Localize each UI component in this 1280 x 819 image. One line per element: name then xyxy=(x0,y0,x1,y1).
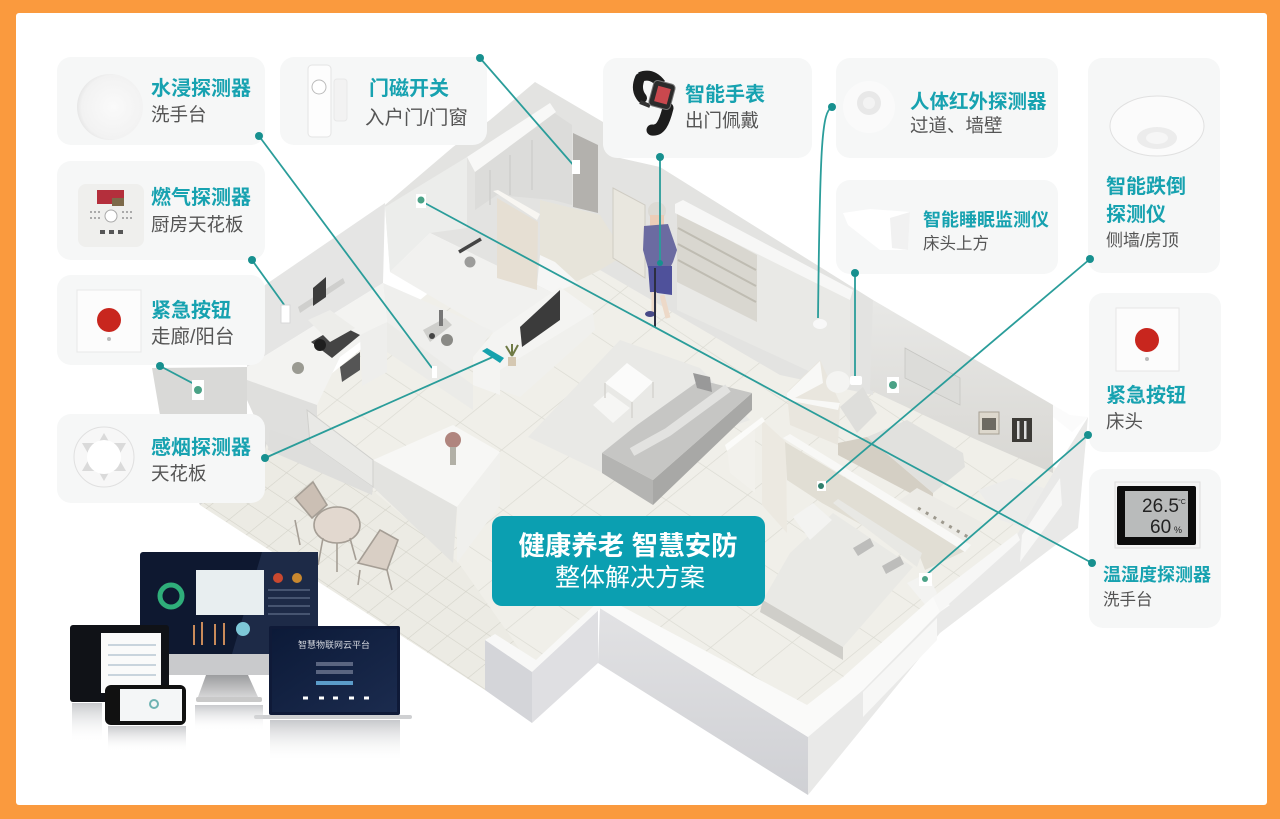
icon: gas detector xyxy=(78,184,144,247)
watch label: 出门佩戴 xyxy=(685,110,759,131)
fall detector label: 侧墙/房顶 xyxy=(1106,231,1179,250)
thermo label xyxy=(1103,565,1211,609)
smoke detector label xyxy=(151,436,251,484)
icon: red button xyxy=(1116,308,1179,371)
gas detector label: 厨房天花板 xyxy=(151,214,244,235)
device: phone xyxy=(105,685,186,725)
water sensor label xyxy=(151,77,251,125)
smoke detector label: 感烟探测器 xyxy=(151,436,251,459)
TV wall xyxy=(473,287,595,395)
TV console xyxy=(500,313,595,397)
second bed xyxy=(760,499,922,660)
title box: 健康养老 智慧安防 xyxy=(518,531,738,561)
wardrobe xyxy=(900,488,983,543)
icon: thermo-hygrometer: 26.5 xyxy=(1142,496,1179,517)
sink xyxy=(423,310,453,346)
pot xyxy=(314,339,326,351)
icon: water sensor xyxy=(77,74,143,140)
bedside button label xyxy=(1106,384,1186,432)
emergency button label xyxy=(151,299,234,348)
panel: emergency button corridor xyxy=(57,275,265,365)
dining island xyxy=(373,425,500,563)
hall niche xyxy=(613,188,645,278)
end wall cap xyxy=(1053,405,1088,432)
bathroom floor xyxy=(390,233,553,333)
sleep monitor label: 床头上方 xyxy=(923,234,989,253)
green wall sensor xyxy=(887,377,899,393)
panel: PIR detector xyxy=(836,58,1058,158)
door sensor label: 入户门/门窗 xyxy=(365,107,468,129)
closet and ledge xyxy=(475,112,572,210)
device: laptop xyxy=(254,626,412,719)
title box xyxy=(492,516,765,606)
living room rug xyxy=(528,340,750,473)
icon: sleep sensor xyxy=(843,209,910,250)
device: desktop monitor xyxy=(140,552,318,702)
window recesses xyxy=(863,478,1062,717)
emergency button label: 走廊/阳台 xyxy=(151,326,234,348)
right outer wall xyxy=(808,417,1088,795)
apartment floor xyxy=(200,200,1060,712)
fall detector label xyxy=(1106,175,1186,250)
balcony table and chairs xyxy=(295,482,398,590)
sofa xyxy=(602,373,752,505)
icon: door sensor xyxy=(308,65,347,137)
panel: smart watch xyxy=(603,58,812,158)
nightstands xyxy=(793,503,937,607)
master bed xyxy=(826,371,965,505)
smoke detector label: 天花板 xyxy=(151,463,207,484)
bedside button label: 紧急按钮 xyxy=(1106,384,1186,407)
fall detector label: 探测仪 xyxy=(1106,203,1166,226)
device: laptop: 智慧物联网云平台 xyxy=(298,639,370,650)
PIR label: 人体红外探测器 xyxy=(910,90,1047,113)
door sensor label: 门磁开关 xyxy=(369,77,449,100)
panel: fall detector xyxy=(1088,58,1220,273)
sleep monitor label: 智能睡眠监测仪 xyxy=(923,209,1049,230)
screen reflections xyxy=(72,703,400,762)
panel: temperature humidity detector xyxy=(1089,469,1221,628)
kitchen back wall xyxy=(247,203,385,367)
wall pictures xyxy=(979,412,1032,442)
second bedroom door and wall xyxy=(727,430,755,493)
bedside button label: 床头 xyxy=(1106,411,1143,432)
bedroom door frame glass xyxy=(787,360,840,445)
panel: gas detector xyxy=(57,161,265,260)
icon: PIR sensor xyxy=(843,81,895,133)
flower vase xyxy=(445,432,461,465)
balcony floor xyxy=(200,447,520,690)
icon: red button xyxy=(77,290,141,352)
bathroom wall xyxy=(385,157,467,272)
title box: 整体解决方案 xyxy=(555,564,705,592)
device group: platform screens xyxy=(70,552,412,762)
icon: smoke detector xyxy=(74,427,134,487)
balcony glass rail xyxy=(307,410,373,487)
floor plan illustration xyxy=(152,82,1088,795)
master bedroom back wall xyxy=(870,300,1053,473)
icon: thermo-hygrometer: % xyxy=(1174,525,1182,535)
PIR label: 过道、墙壁 xyxy=(910,115,1003,136)
wall shelf and dark panel xyxy=(298,278,345,313)
PIR label xyxy=(910,90,1047,136)
water sensor label: 水浸探测器 xyxy=(151,77,251,100)
emergency button label: 紧急按钮 xyxy=(151,299,231,322)
thermo label: 洗手台 xyxy=(1103,590,1152,609)
coffee tables xyxy=(593,363,653,423)
connector lines xyxy=(160,58,1092,576)
sleep monitor label xyxy=(923,209,1049,253)
kitchen counter xyxy=(247,283,387,405)
panel: sleep monitor xyxy=(836,180,1058,274)
upper back wall xyxy=(385,82,873,395)
icon: thermo-hygrometer: °C xyxy=(1178,498,1186,506)
shower head xyxy=(459,239,481,268)
left outer block xyxy=(152,367,270,505)
partition wall xyxy=(785,442,967,570)
gas stove xyxy=(311,325,360,358)
watch label: 智能手表 xyxy=(685,83,765,106)
bathroom right fixtures xyxy=(978,478,1050,530)
gas detector label: 燃气探测器 xyxy=(151,186,251,209)
installed sensors xyxy=(192,160,932,586)
door sensor label xyxy=(365,77,468,129)
fall detector label: 智能跌倒 xyxy=(1106,175,1186,198)
connector dots xyxy=(156,54,1096,567)
kettle xyxy=(292,362,304,374)
icon: fall sensor xyxy=(1110,96,1204,156)
bathroom door xyxy=(497,198,538,290)
entrance door xyxy=(573,133,598,213)
panel: emergency button bedside xyxy=(1089,293,1221,452)
plant xyxy=(506,344,518,366)
oven xyxy=(340,352,360,382)
person: elderly woman with watch xyxy=(643,202,677,327)
icon: thermo-hygrometer xyxy=(1115,482,1200,548)
panel: smoke detector xyxy=(57,414,265,503)
water sensor label: 洗手台 xyxy=(151,104,207,125)
lower balcony wall xyxy=(485,640,532,723)
icon: watch xyxy=(638,76,676,130)
thermo label: 温湿度探测器 xyxy=(1103,565,1211,585)
hall storage cabinet xyxy=(677,203,850,385)
tiled wall strip xyxy=(308,310,355,342)
watch label xyxy=(685,83,765,131)
panel: door magnet xyxy=(280,57,487,145)
panel: water leak detector xyxy=(57,57,265,145)
device: tablet xyxy=(70,625,169,702)
gas detector label xyxy=(151,186,251,235)
entry floor xyxy=(540,200,625,293)
icon: thermo-hygrometer: 60 xyxy=(1150,517,1171,538)
front outer wall xyxy=(598,607,808,795)
